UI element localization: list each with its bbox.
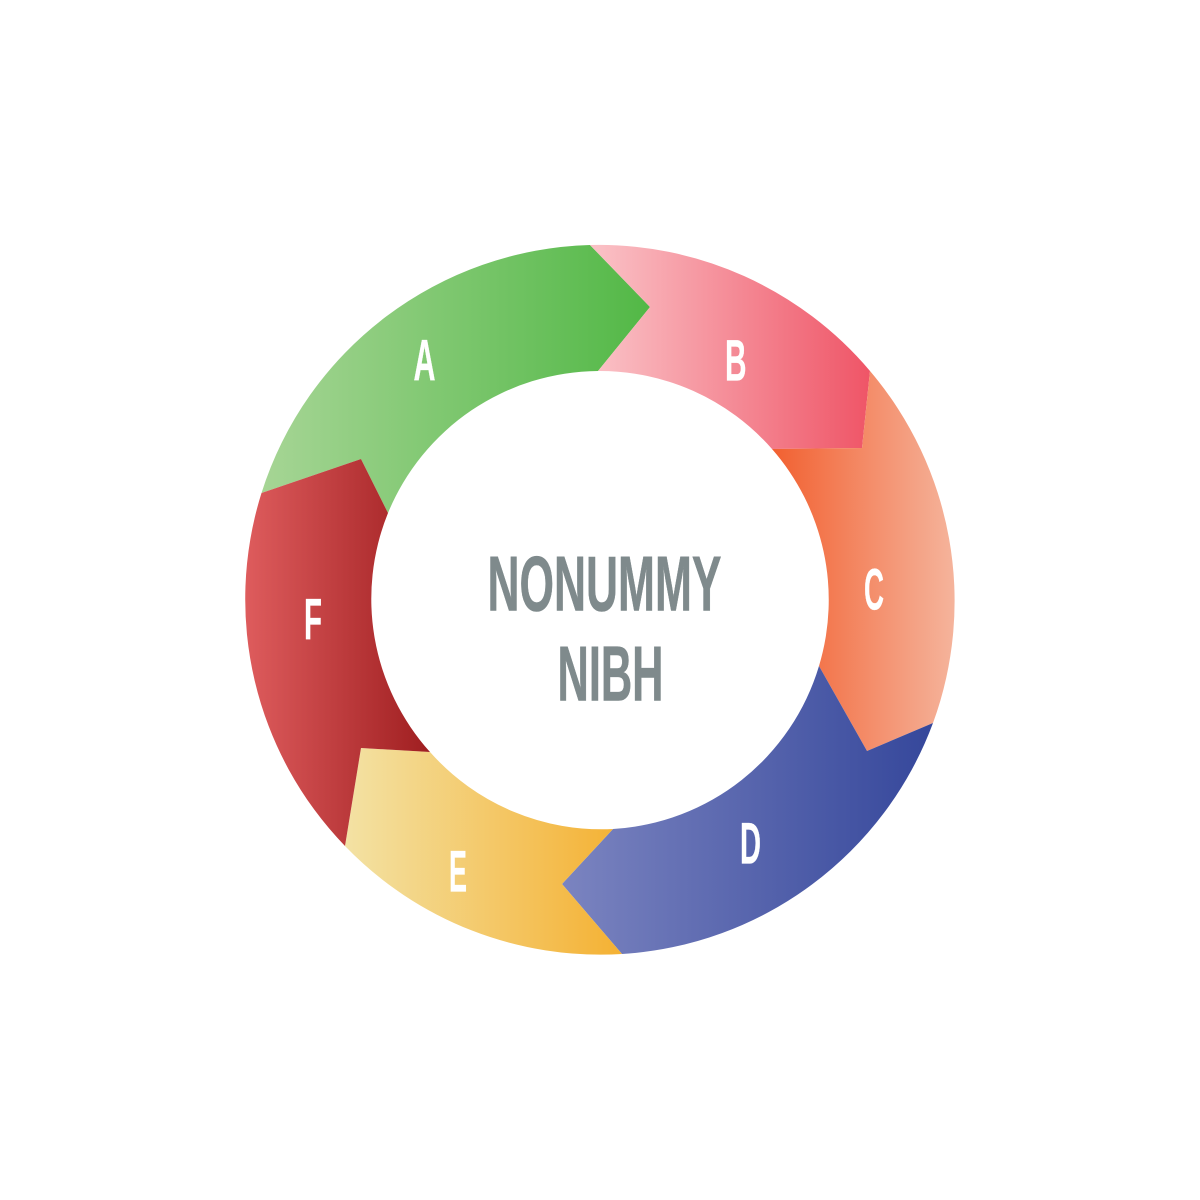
arrow: pink <box>590 245 870 449</box>
segment A <box>262 245 650 513</box>
segment E: E <box>449 840 467 904</box>
letter F: F <box>304 588 322 652</box>
letter D: D <box>740 812 761 876</box>
arrow: green <box>262 245 650 513</box>
letter B: B <box>725 328 746 394</box>
arrow: yellow <box>345 748 622 955</box>
letter A: A <box>414 328 436 394</box>
center title <box>488 540 722 718</box>
segment C: C <box>864 558 884 622</box>
arrow: orange <box>772 371 955 751</box>
title line 1: NONUMMY <box>488 540 722 628</box>
segment B <box>590 245 870 449</box>
segment C <box>772 371 955 751</box>
segment E <box>345 748 622 955</box>
title line 2: NIBH <box>558 630 664 718</box>
segment D <box>562 666 933 954</box>
arrow: blue <box>562 666 933 954</box>
arrow: red <box>245 459 430 846</box>
segment F <box>245 459 430 846</box>
